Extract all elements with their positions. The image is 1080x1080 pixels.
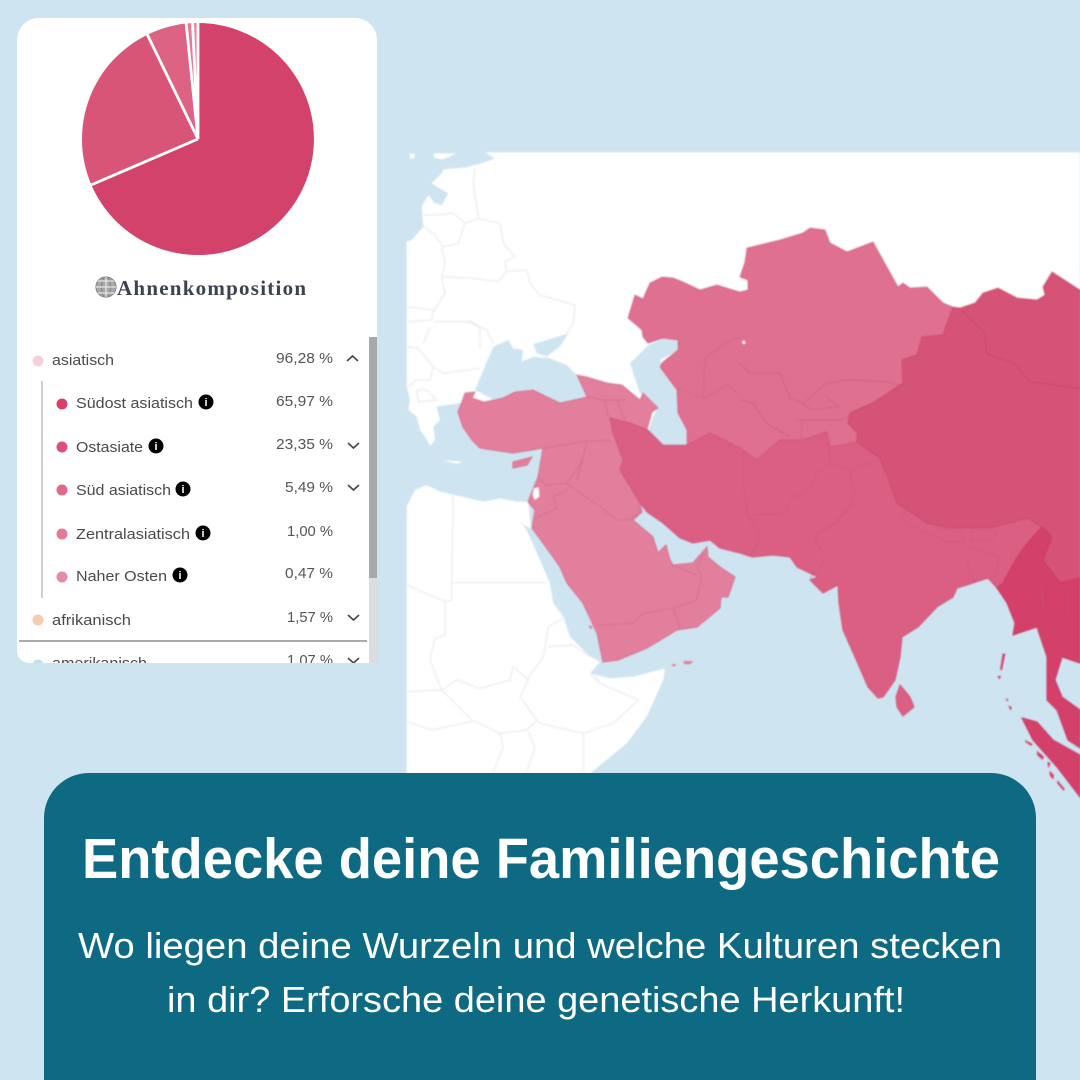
map: Iran, Afghanistan, Pakistan and India <box>610 418 1042 716</box>
map: Israel highlight <box>533 487 539 500</box>
map: white land of Europe and Russia <box>407 152 1080 446</box>
row: Süd asiatisch: 5,49 % <box>285 479 333 496</box>
row: Zentralasiatisch: 1,00 % <box>287 523 333 540</box>
row: asiatisch: asiatisch <box>52 352 114 369</box>
row: Zentralasiatisch <box>56 523 333 543</box>
row divider <box>19 640 367 642</box>
row: afrikanisch <box>32 609 359 629</box>
map: China and Mongolia <box>848 272 1080 583</box>
world map <box>407 152 1080 797</box>
row: Naher Osten <box>56 565 333 585</box>
row: Zentralasiatisch: i <box>201 528 205 540</box>
map: African country borders <box>407 495 638 772</box>
pie chart <box>82 22 314 255</box>
row: Zentralasiatisch: Zentralasiatisch <box>76 526 190 543</box>
map: small southeast Asian islands <box>997 653 1065 791</box>
row: Süd asiatisch: i <box>181 484 185 496</box>
row: amerikanisch, clipped: 1,07 % <box>287 652 333 669</box>
map: China and Mongolia border <box>962 310 1080 388</box>
row: Ostasiate: Ostasiate <box>76 439 143 456</box>
map: Central Asia <box>628 228 953 460</box>
map: Myanmar, Thailand and Southeast Asia <box>997 527 1080 797</box>
map: white land of Africa <box>407 485 665 773</box>
map: borders of the Arabian peninsula <box>535 460 705 628</box>
row: Naher Osten: i <box>178 570 182 582</box>
map: seas over the land <box>475 333 687 445</box>
map: small white islands <box>409 153 463 464</box>
map: country borders in the coloured area <box>543 337 740 480</box>
row: asiatisch: 96,28 % <box>276 350 333 367</box>
scrollbar <box>369 337 377 663</box>
chart title: Ahnenkomposition <box>117 276 306 300</box>
panel: ancestry card <box>17 18 377 672</box>
panel: headline banner <box>44 773 1036 1080</box>
row: afrikanisch: 1,57 % <box>287 609 333 626</box>
row: Südost asiatisch: i <box>204 397 208 409</box>
row: Naher Osten: 0,47 % <box>285 565 333 582</box>
body text line 1: Wo liegen deine Wurzeln und welche Kulturen stecken <box>78 925 1002 966</box>
row: Ostasiate: 23,35 % <box>276 436 333 453</box>
map: European country borders <box>407 168 575 402</box>
row: Südost asiatisch <box>56 393 333 412</box>
icon: globe <box>96 277 116 297</box>
map: borders of India and neighbours <box>745 502 1068 620</box>
row: Südost asiatisch: 65,97 % <box>276 393 333 410</box>
card background <box>17 18 377 663</box>
banner background <box>44 773 1036 1080</box>
row: amerikanisch, clipped <box>33 655 360 663</box>
row: asiatisch <box>32 350 358 369</box>
heading: Entdecke deine Familiengeschichte <box>82 827 1000 891</box>
row: Süd asiatisch <box>56 479 359 499</box>
row: Ostasiate <box>56 436 359 456</box>
map: Aral Sea speck <box>742 341 745 344</box>
map: Socotra islands <box>589 625 693 666</box>
row: Ostasiate: i <box>154 441 158 453</box>
row: Naher Osten: Naher Osten <box>76 568 167 585</box>
tree line <box>41 381 43 598</box>
row: afrikanisch: afrikanisch <box>52 612 131 629</box>
map: Turkey, Caucasus and Arabian peninsula <box>458 375 735 662</box>
row: Südost asiatisch: Südost asiatisch <box>76 395 193 412</box>
body text line 2: in dir? Erforsche deine genetische Herkunft! <box>167 979 905 1020</box>
row: Süd asiatisch: Süd asiatisch <box>76 482 171 499</box>
map: borders of Central and South Asia <box>740 363 903 550</box>
row: amerikanisch, clipped: amerikanisch <box>52 655 147 672</box>
